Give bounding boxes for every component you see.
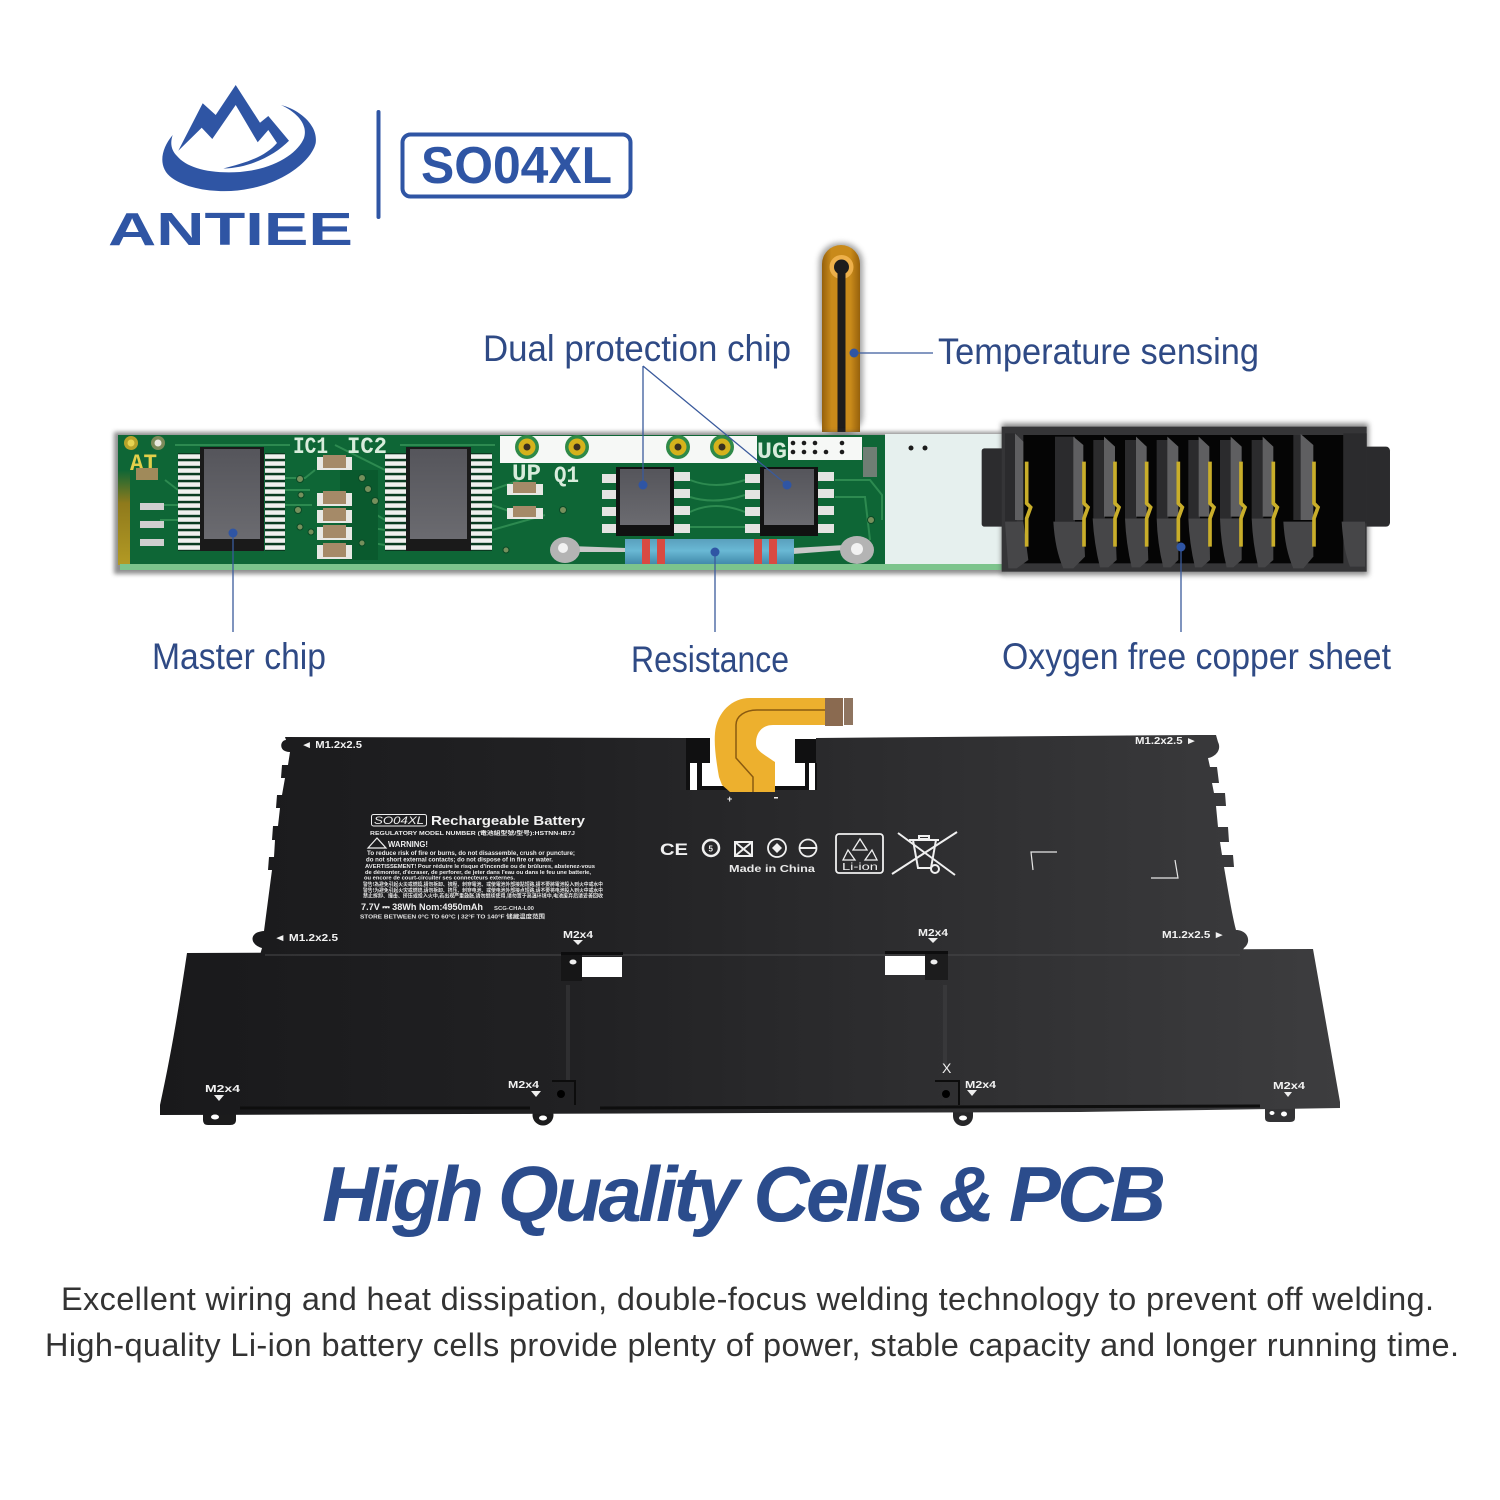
icon: swoosh [162,105,316,191]
description text: Excellent wiring and heat dissipation, double-focus welding technology to prevent off welding. [61,1281,1434,1317]
dual protection chip right [745,467,834,536]
callout: dual protection chip [483,328,792,490]
divider [376,110,380,219]
screw size labels: M2x4 [918,928,949,939]
smd capacitors [317,455,543,559]
copper traces [160,445,882,545]
battery connector [982,423,1390,575]
silkscreen text: UP [512,461,541,487]
placement corner marks [1031,852,1178,878]
screw size labels [205,736,1306,1101]
silkscreen text [130,434,787,489]
certification marks: CE [660,840,688,859]
screw size labels: M2x4 [1273,1081,1306,1092]
screw size labels: M2x4 [965,1080,997,1091]
connector notch blocks [686,738,817,790]
battery label text: SCG-CHA-L00 [494,906,534,912]
contact posts [1005,433,1367,523]
silkscreen text: IC2 [347,434,387,460]
screw size labels: M1.2x2.5 ► [1135,736,1197,747]
description text [45,1281,1459,1363]
silkscreen text: AT [130,451,157,477]
upper battery body [252,735,1248,955]
battery label text: ou encore de court-circuiter ses connecteurs externes. [364,876,515,882]
callout: temperature sensing: Temperature sensing [938,331,1259,372]
callout: oxygen free copper sheet: Oxygen free copper sheet [1002,636,1392,677]
battery label text: de démonter, d'écraser, de perforer, de jeter dans l'eau ou dans le feu une batterie, [365,870,591,876]
window left [561,952,623,981]
battery label text: 警告!為避免引起火災或燃燒,請勿拆卸、擠壓、刺穿電池、或使電池外部接點短路,請不要將電池投入到火中或水中 [363,881,603,888]
battery label text: 禁止拆卸、撞击、挤压或投入火中,若出现严重鼓胀,请勿继续使用,请勿置于高温环境中,电池废弃后请妥善回收 [363,892,603,900]
icon: mountain [178,85,289,168]
via holes [294,474,874,553]
model badge: SO04XL [421,137,612,195]
battery label text: AVERTISSEMENT! Pour réduire le risque d'incendie ou de brûlures, abstenez-vous [365,864,595,870]
board substrate [118,435,886,565]
callout: master chip: Master chip [152,636,326,677]
logo: ANTIEE [108,85,353,255]
certification marks [660,839,816,875]
bottom rim [240,1106,1260,1108]
board bottom edge [120,564,1006,570]
battery label text: Rechargeable Battery [431,813,586,828]
via dots [791,441,928,454]
resistor [550,536,874,565]
screw size labels: M1.2x2.5 ► [1162,930,1225,941]
pcb board [114,432,1006,574]
screw size labels: ◄ M1.2x2.5 [301,740,362,751]
certification marks: Made in China [729,864,816,875]
lower screw recesses [552,1081,959,1105]
connector shadow [1002,423,1368,575]
silkscreen text: UG [757,439,787,465]
white silkscreen panels [500,436,757,463]
lower battery body [160,949,1340,1115]
screw size labels: ◄ M1.2x2.5 [274,933,339,944]
battery label text: do not short external contacts; do not dispose of in fire or water. [366,856,553,864]
mounting ears [203,1100,1295,1126]
master chip [178,447,285,551]
temperature sensor tab [819,243,863,435]
vertical ridges [568,985,945,1080]
battery label text: To reduce risk of fire or burns, do not disassemble, crush or puncture; [367,850,575,857]
battery label text: SO04XL [374,815,424,827]
screw size labels: M2x4 [205,1084,241,1095]
gold contacts [1027,462,1318,547]
left edge components [136,468,164,546]
dual protection chip left [602,467,690,536]
callout: resistance: Resistance [631,639,789,680]
flexible flat cable [715,698,853,792]
battery label text: 7.7V ⎓ 38Wh Nom:4950mAh [361,902,483,913]
screw size labels: M2x4 [508,1080,540,1091]
board shadow [114,432,1004,574]
window right [885,951,948,980]
callout: master chip [152,528,326,677]
recycling li-ion icon: Li-ion [842,862,878,873]
certification marks: 5 [708,844,714,854]
battery label text [360,813,603,920]
brand name: ANTIEE [108,203,353,255]
recycling li-ion icon [836,834,883,873]
gold edge [118,470,130,565]
polarity marks: + [727,794,732,804]
callout: dual protection chip: Dual protection chip [483,328,791,369]
screw size labels: M2x4 [563,930,594,941]
callout: oxygen free copper sheet [1002,542,1392,677]
crossed-out bin icon [892,832,957,875]
gold pads [515,435,734,459]
screw size labels: X [942,1060,952,1076]
small sot component [863,447,877,477]
connector housing [1002,427,1367,572]
callout: resistance [631,548,789,680]
battery pack [160,698,1340,1126]
description text: High-quality Li-ion battery cells provide plenty of power, stable capacity and longer running time. [45,1327,1459,1363]
headline: High Quality Cells & PCB [322,1150,1166,1238]
gold corner pads [124,436,165,450]
battery label text: REGULATORY MODEL NUMBER (電池組型號/型号):HSTNN-IB7J [370,829,575,837]
second ic chip [385,447,492,551]
side tabs [982,448,1008,527]
battery label text: 警告!为避免引起火灾或燃烧,请勿拆卸、挤压、刺穿电池、或使电池外部接点短路,请不要将电池投入到火中或水中 [363,887,603,894]
battery label text: WARNING! [388,840,428,849]
ear holes [211,1111,1287,1120]
silkscreen text: Q1 [554,463,579,489]
silkscreen text: IC1 [293,434,328,460]
battery label text: STORE BETWEEN 0°C TO 60°C | 32°F TO 140°F 储藏温度范围 [360,912,546,920]
